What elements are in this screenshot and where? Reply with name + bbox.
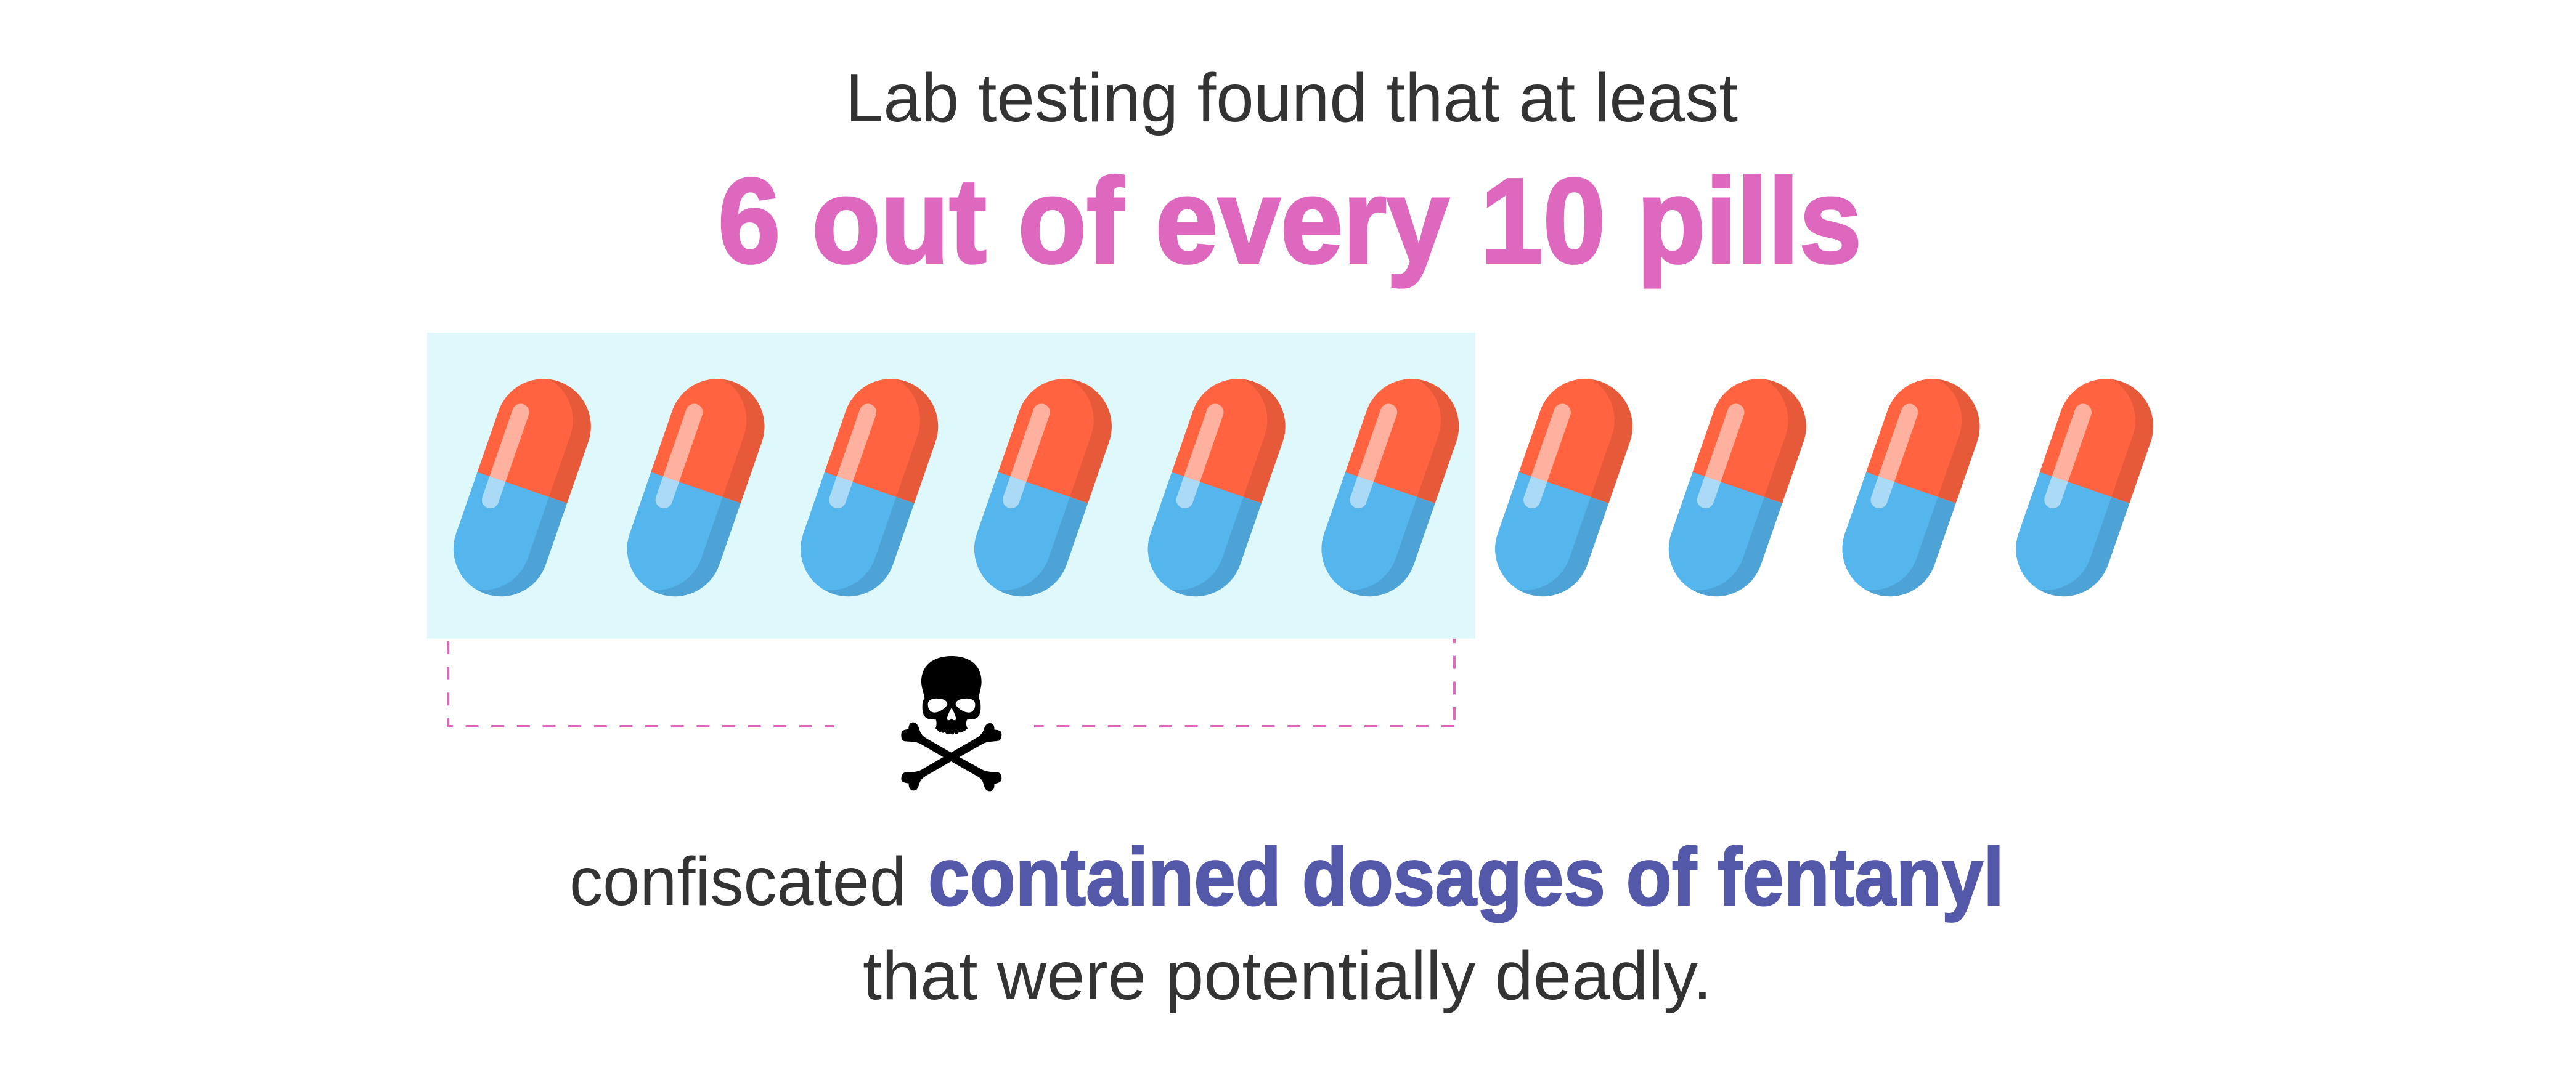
- pill 5: [1115, 358, 1300, 612]
- pill 3: [768, 358, 953, 612]
- dashed bracket: [448, 639, 1454, 726]
- pill 2: [595, 358, 780, 612]
- text: contained dosages of fentanyl: contained dosages of fentanyl: [928, 832, 2004, 923]
- text: confiscated: confiscated: [569, 843, 907, 920]
- panel: highlighted six pills: [427, 333, 1475, 639]
- pill 7: [1462, 358, 1648, 612]
- pill 10: [1983, 358, 2169, 612]
- icon: skull and crossbones: [901, 656, 1001, 791]
- pill 8: [1636, 358, 1821, 612]
- pill 1: [421, 358, 606, 612]
- pill 6: [1289, 358, 1474, 612]
- text: that were potentially deadly: that were potentially deadly.: [863, 938, 1712, 1014]
- pill row: [421, 358, 2169, 612]
- pill 9: [1810, 358, 1995, 612]
- pill 4: [942, 358, 1127, 612]
- intro text: Lab testing found that at least: [846, 60, 1738, 136]
- headline: 6 out of every 10 pills: 6 out of every 10 pills: [718, 153, 1862, 288]
